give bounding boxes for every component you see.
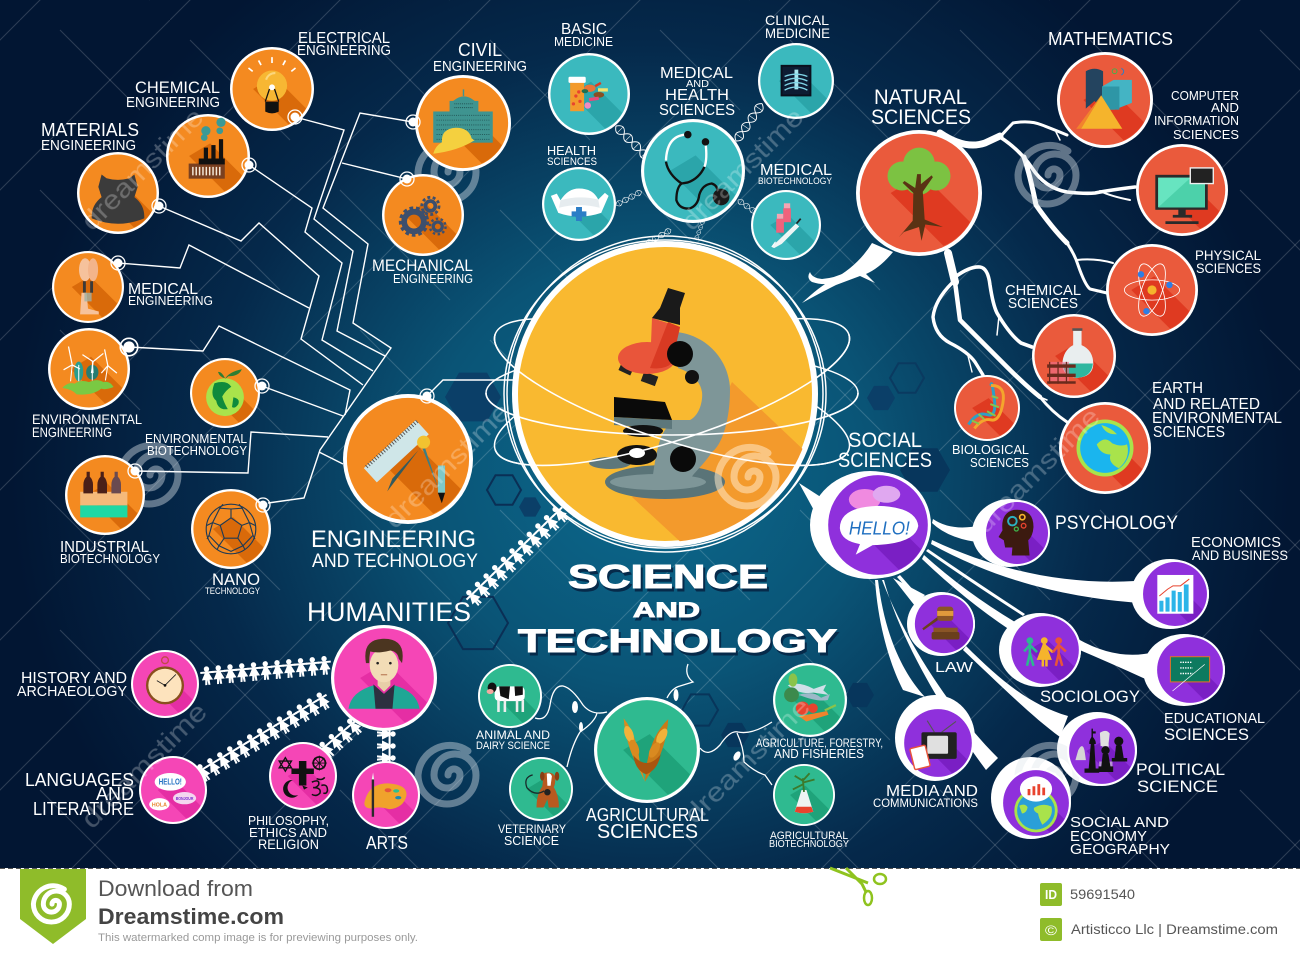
label: physical sciences: PHYSICAL	[1195, 247, 1261, 263]
node: social sciences	[825, 472, 931, 578]
node: agricultural biotechnology	[773, 764, 835, 826]
label: chemical engineering: ENGINEERING	[126, 94, 220, 111]
node: natural sciences	[856, 130, 982, 256]
label: civil engineering: ENGINEERING	[433, 58, 527, 75]
heading: medical and health sciences	[659, 65, 735, 119]
label: civil engineering	[433, 40, 527, 75]
icon: fish and vegetables	[784, 673, 836, 721]
node: agriculture, forestry and fisheries	[773, 663, 847, 737]
panel: engineering and technology	[32, 30, 527, 596]
label: social sciences: SCIENCES	[838, 449, 932, 472]
background hexagons	[445, 363, 950, 747]
label: veterinary science: VETERINARY	[498, 822, 566, 836]
title: science and technology: SCIENCE	[568, 558, 768, 595]
node: industrial biotechnology	[65, 455, 145, 535]
icon: globe with data bubble	[1014, 776, 1058, 832]
icon: gavel	[922, 607, 960, 640]
icon: vials and syringe	[771, 203, 801, 248]
panel: humanities	[17, 597, 471, 853]
central atom orbits (back)	[480, 236, 864, 552]
icon: prosthetic legs	[79, 258, 99, 314]
label: social and economy geography: ECONOMY	[1070, 828, 1147, 845]
label: environmental engineering: ENVIRONMENTAL	[32, 411, 142, 427]
node: medical biotechnology	[751, 190, 821, 260]
central atom orbits (front)	[480, 335, 864, 495]
label: health sciences: HEALTH	[547, 143, 596, 158]
label: computer and information sciences: SCIENCES	[1173, 127, 1239, 142]
label: nano technology: NANO	[212, 570, 260, 589]
label: industrial biotechnology: BIOTECHNOLOGY	[60, 551, 160, 566]
icon: ruler and compass	[364, 420, 445, 503]
icon: paint palette	[364, 773, 406, 817]
label: psychology: PSYCHOLOGY	[1055, 513, 1178, 534]
icon: factory	[189, 118, 226, 179]
dreamstime diagonal watermarks: dreamstime	[968, 401, 1106, 539]
node: social and economy geography	[1001, 768, 1071, 838]
download text: Dreamstime.com	[98, 904, 284, 929]
label: natural sciences: SCIENCES	[871, 106, 971, 129]
node: medical and health sciences	[641, 119, 745, 223]
node: agricultural sciences	[594, 697, 700, 803]
node: health sciences	[542, 167, 616, 241]
heading: engineering and technology: ENGINEERING	[311, 526, 476, 553]
label: computer and information sciences	[1154, 88, 1239, 142]
icon: head with gears	[999, 510, 1034, 555]
node: medical engineering	[52, 251, 124, 323]
icon: man portrait	[348, 639, 420, 709]
label: political science: POLITICAL	[1136, 760, 1225, 779]
label: agriculture, forestry and fisheries: AND FISHERIES	[774, 746, 864, 761]
icon: multilingual speech bubbles: HOLA	[152, 802, 167, 808]
label: materials engineering	[41, 120, 139, 154]
label: agriculture, forestry and fisheries	[756, 736, 883, 761]
label: earth and related environmental sciences: EARTH	[1152, 380, 1203, 397]
label: environmental biotechnology: ENVIRONMENTAL	[145, 431, 247, 446]
label: earth and related environmental sciences	[1152, 380, 1282, 441]
label: educational sciences: SCIENCES	[1164, 725, 1249, 744]
node: languages and literature	[139, 756, 207, 824]
microscope long shadow	[632, 382, 802, 542]
watermark spiral on microscope	[718, 447, 776, 506]
label: environmental engineering	[32, 411, 142, 440]
title: science and technology: TECHNOLOGY	[518, 623, 837, 659]
label: materials engineering: ENGINEERING	[41, 137, 136, 154]
label: media and communications: MEDIA AND	[886, 783, 978, 800]
icon: wheat sheaf	[622, 718, 670, 782]
dreamstime diagonal watermarks: dreamstime	[75, 102, 209, 236]
node: chemical engineering	[166, 114, 250, 198]
label: earth and related environmental sciences: SCIENCES	[1153, 424, 1225, 441]
label: law: LAW	[935, 659, 974, 676]
node: physical sciences	[1106, 244, 1198, 336]
node: educational sciences	[1155, 635, 1225, 705]
DNA connectors: medical branches	[613, 101, 766, 246]
label: educational sciences: EDUCATIONAL	[1164, 710, 1265, 727]
dreamstime diagonal watermarks: dreamstime	[378, 396, 516, 534]
icon: earth	[1076, 419, 1134, 477]
title: science and technology: AND	[633, 599, 700, 622]
node: law	[913, 593, 975, 655]
label: history and archaeology: ARCHAEOLOGY	[17, 683, 127, 700]
icon: pocket watch	[146, 657, 184, 704]
label: economics and business: ECONOMICS	[1191, 534, 1281, 551]
label: history and archaeology	[17, 670, 127, 700]
label: clinical medicine	[765, 12, 830, 41]
label: arts: ARTS	[366, 833, 408, 853]
label: languages and literature: LITERATURE	[33, 799, 134, 819]
icon: geometric solids	[1076, 68, 1132, 129]
label: mechanical engineering	[372, 256, 473, 286]
label: health sciences: SCIENCES	[547, 156, 597, 168]
icon: multilingual speech bubbles	[149, 773, 196, 810]
label: medical biotechnology: BIOTECHNOLOGY	[758, 176, 832, 186]
circuit lines: engineering branches	[118, 113, 515, 503]
image id: 59691540	[1070, 886, 1135, 902]
watermark spirals	[120, 142, 1076, 804]
icon: body armour vest	[92, 175, 144, 224]
label: basic medicine: MEDICINE	[554, 34, 613, 49]
central microscope panel	[515, 244, 830, 560]
icon: dairy cow	[487, 683, 525, 712]
node: environmental engineering	[48, 328, 130, 410]
node: computer and information sciences	[1136, 144, 1228, 236]
image id	[1040, 883, 1135, 906]
label: chemical sciences: SCIENCES	[1008, 295, 1078, 312]
label: basic medicine: BASIC	[561, 21, 607, 38]
node: media and communications	[902, 707, 974, 779]
label: social sciences	[838, 429, 932, 472]
node: basic medicine	[548, 53, 630, 135]
label: medical biotechnology: MEDICAL	[760, 162, 832, 179]
label: economics and business: AND BUSINESS	[1192, 547, 1288, 563]
label: chemical sciences: CHEMICAL	[1005, 282, 1081, 299]
label: agricultural biotechnology	[769, 830, 849, 850]
label: industrial biotechnology	[60, 539, 160, 566]
icon: scissors	[830, 868, 886, 905]
label: chemical sciences	[1005, 282, 1081, 312]
label: animal and dairy science: ANIMAL AND	[476, 728, 550, 742]
footer: dreamstime credit strip	[0, 868, 1300, 957]
node: mathematics	[1057, 52, 1153, 148]
title: science and technology	[518, 558, 837, 659]
label: civil engineering: CIVIL	[458, 40, 502, 60]
label: biological sciences: SCIENCES	[970, 455, 1029, 470]
node: environmental biotechnology	[190, 358, 260, 428]
node: earth and related environmental sciences	[1059, 402, 1151, 494]
dreamstime diagonal watermarks: dreamstime	[75, 696, 213, 834]
label: mechanical engineering: ENGINEERING	[393, 271, 473, 286]
dreamstime diagonal watermarks: dreamstime	[678, 691, 816, 829]
label: basic medicine	[554, 21, 613, 49]
node: psychology	[984, 500, 1050, 566]
label: languages and literature	[25, 770, 134, 819]
label: animal and dairy science	[476, 728, 550, 752]
label: earth and related environmental sciences: AND RELATED	[1153, 396, 1260, 413]
label: medical engineering: MEDICAL	[128, 281, 198, 298]
vine connectors: agricultural branches	[535, 664, 772, 785]
icon: three people	[1024, 638, 1066, 667]
label: health sciences	[547, 143, 597, 168]
label: social and economy geography: GEOGRAPHY	[1070, 841, 1170, 858]
social sciences branches	[799, 471, 1225, 839]
icon: light bulb	[248, 57, 296, 113]
panel: social sciences	[825, 429, 1288, 858]
label: chemical engineering: CHEMICAL	[135, 78, 220, 97]
label: medical biotechnology	[758, 162, 832, 186]
node: philosophy, ethics and religion	[269, 742, 337, 810]
author credit: Artisticco Llc | Dreamstime.com	[1071, 921, 1278, 937]
heading: engineering and technology: AND TECHNOLOGY	[312, 551, 478, 572]
label: languages and literature: AND	[96, 784, 134, 804]
label: media and communications	[873, 783, 978, 810]
icon: flask and test tubes	[1047, 328, 1093, 384]
label: agricultural biotechnology: BIOTECHNOLOGY	[769, 839, 849, 850]
icon: plant in flask	[793, 773, 815, 813]
label: political science	[1136, 760, 1225, 796]
label: political science: SCIENCE	[1137, 777, 1218, 796]
node: economics and business	[1141, 560, 1209, 628]
label: media and communications: COMMUNICATIONS	[873, 796, 978, 810]
icon: tree	[888, 148, 950, 241]
icon: speech bubbles: HELLO!	[849, 519, 910, 539]
label: physical sciences: SCIENCES	[1196, 260, 1261, 276]
download text: This watermarked comp image is for previewing purposes only.	[98, 932, 418, 944]
heading: agricultural sciences: SCIENCES	[597, 821, 698, 843]
microscope illustration	[589, 288, 730, 499]
node: engineering and technology	[343, 394, 473, 524]
node: biological sciences	[954, 375, 1020, 441]
label: agricultural biotechnology: AGRICULTURAL	[770, 830, 848, 842]
connector dots	[111, 110, 434, 512]
heading: engineering and technology	[311, 526, 478, 572]
label: electrical engineering: ELECTRICAL	[298, 30, 390, 47]
label: biological sciences	[952, 442, 1029, 470]
dreamstime diagonal watermarks: dreamstime	[675, 102, 809, 236]
label: clinical medicine: MEDICINE	[765, 25, 830, 41]
label: philosophy, ethics and religion: ETHICS AND	[249, 825, 327, 840]
node: sociology	[1009, 614, 1081, 686]
icon: rising bar chart	[1157, 575, 1193, 614]
icon: television and phone	[910, 721, 957, 770]
node: arts	[352, 761, 420, 829]
author credit: ©	[1045, 922, 1058, 938]
icon: wind turbines	[62, 346, 117, 395]
label: electrical engineering: ENGINEERING	[297, 42, 391, 59]
label: environmental engineering: ENGINEERING	[32, 424, 112, 440]
icon: buckyball	[206, 504, 256, 554]
icon: multilingual speech bubbles: BONJOUR	[176, 796, 193, 801]
label: electrical engineering	[297, 30, 391, 59]
panel: agricultural sciences	[476, 663, 883, 850]
icon: x-ray	[782, 66, 810, 95]
node: animal and dairy science	[478, 664, 542, 728]
label: sociology: SOCIOLOGY	[1040, 687, 1140, 706]
heading: medical and health sciences: AND	[686, 79, 709, 90]
icon: green spiral badge	[20, 869, 86, 944]
label: earth and related environmental sciences: ENVIRONMENTAL	[1152, 410, 1282, 427]
label: natural sciences: NATURAL	[874, 86, 967, 109]
node: clinical medicine	[758, 43, 834, 119]
label: animal and dairy science: DAIRY SCIENCE	[476, 740, 550, 752]
icon: dog with stethoscope	[526, 772, 559, 808]
heading: agricultural sciences: AGRICULTURAL	[586, 805, 709, 825]
label: computer and information sciences: AND	[1211, 100, 1239, 115]
node: chemical sciences	[1032, 314, 1116, 398]
icon: monitor	[1157, 168, 1213, 224]
image id: ID	[1045, 887, 1057, 902]
node: electrical engineering	[230, 47, 314, 131]
label: industrial biotechnology: INDUSTRIAL	[60, 539, 149, 556]
label: physical sciences	[1195, 247, 1261, 276]
label: social and economy geography	[1070, 814, 1170, 858]
label: clinical medicine: CLINICAL	[765, 12, 829, 28]
icon: chalkboard	[1170, 657, 1210, 691]
node: humanities	[331, 625, 437, 731]
label: veterinary science: SCIENCE	[504, 833, 559, 848]
node: materials engineering	[77, 152, 159, 234]
panel: natural sciences	[856, 29, 1282, 494]
label: computer and information sciences: COMPUTER	[1171, 88, 1239, 103]
dreamstime diagonal watermarks	[75, 102, 1106, 834]
label: computer and information sciences: INFORMATION	[1154, 113, 1239, 128]
label: philosophy, ethics and religion: PHILOSOPHY,	[248, 813, 329, 828]
icon: religious symbols	[279, 756, 327, 798]
label: natural sciences	[871, 86, 971, 129]
icon: nurse cap	[551, 188, 609, 221]
label: history and archaeology: HISTORY AND	[21, 670, 127, 687]
label: social and economy geography: SOCIAL AND	[1070, 814, 1169, 831]
icon: bottles on crate	[80, 472, 127, 517]
natural sciences roots	[933, 122, 1135, 422]
label: chemical engineering	[126, 78, 220, 111]
label: environmental biotechnology: BIOTECHNOLOGY	[147, 443, 247, 458]
heading: agricultural sciences	[586, 805, 709, 843]
icon: stethoscope	[666, 132, 729, 209]
paper-people chains: humanities branches	[193, 503, 571, 784]
download text	[98, 876, 418, 944]
label: nano technology	[205, 570, 260, 596]
label: languages and literature: LANGUAGES	[25, 770, 134, 790]
heading: humanities: HUMANITIES	[307, 597, 471, 627]
label: veterinary science	[498, 822, 566, 848]
icon: multilingual speech bubbles: HELLO!	[159, 778, 182, 787]
author credit	[1040, 918, 1278, 941]
icon: chess pieces	[1075, 729, 1127, 773]
label: materials engineering: MATERIALS	[41, 120, 139, 140]
label: agriculture, forestry and fisheries: AGRICULTURE, FORESTRY,	[756, 736, 883, 750]
label: philosophy, ethics and religion	[248, 813, 329, 852]
node: veterinary science	[509, 757, 573, 821]
label: medical engineering	[128, 281, 213, 308]
label: biological sciences: BIOLOGICAL	[952, 442, 1029, 457]
heading: medical and health sciences: HEALTH	[665, 87, 729, 104]
label: nano technology: TECHNOLOGY	[205, 586, 260, 596]
node: nano technology	[191, 489, 271, 569]
label: environmental biotechnology	[145, 431, 247, 458]
node: civil engineering	[415, 75, 511, 171]
label: medical engineering: ENGINEERING	[128, 293, 213, 308]
icon: building and hard hat	[433, 89, 493, 154]
icon: green globe with sprout	[206, 369, 244, 416]
icon: pills	[568, 77, 608, 111]
heading: medical and health sciences: SCIENCES	[659, 102, 735, 119]
root towards central circle	[802, 243, 893, 303]
node: political science	[1067, 716, 1137, 786]
label: mathematics: MATHEMATICS	[1048, 29, 1173, 49]
icon: atom	[1124, 261, 1180, 319]
label: economics and business	[1191, 534, 1288, 563]
label: mechanical engineering: MECHANICAL	[372, 256, 473, 275]
download text: Download from	[98, 876, 253, 901]
label: social sciences: SOCIAL	[848, 429, 922, 452]
label: philosophy, ethics and religion: RELIGION	[258, 836, 319, 852]
heading: medical and health sciences: MEDICAL	[660, 65, 733, 82]
icon: gears	[400, 197, 446, 235]
icon: DNA helix	[969, 384, 1003, 428]
node: history and archaeology	[131, 650, 199, 718]
label: educational sciences	[1164, 710, 1265, 744]
node: mechanical engineering	[382, 174, 464, 256]
panel: medical and health sciences	[542, 12, 834, 260]
